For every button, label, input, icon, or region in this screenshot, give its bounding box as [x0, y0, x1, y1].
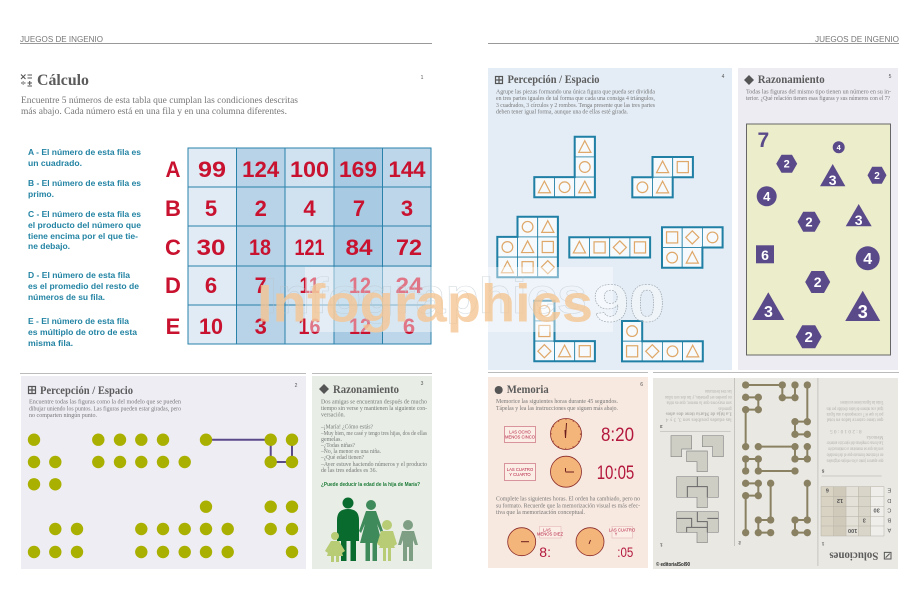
conditions list: misma fila.: [28, 338, 73, 348]
number table: 124: [242, 157, 280, 182]
solution 4 and 5 text, table, title: Las horas completas del ejercicio anterior: [827, 440, 883, 446]
digital time 10:05: 10:05: [597, 463, 634, 484]
dialogue text: versación.: [321, 411, 345, 418]
number table: [165, 148, 431, 344]
solution 4 and 5 text, table, title: Todas las figuras tienen un número: [840, 399, 883, 406]
number table: D: [165, 273, 181, 298]
number table: 72: [396, 235, 422, 260]
number table: 169: [339, 157, 377, 182]
conditions list: B - El número de esta fila es: [28, 178, 141, 188]
dialogue text: Dos amigas se encuentran después de mucho: [321, 398, 427, 406]
figure: father: [337, 498, 359, 561]
figures board: 2: [805, 329, 813, 346]
number table: 4: [303, 196, 316, 221]
model lines: [206, 440, 292, 462]
watermark: Infographics: [257, 274, 593, 334]
number table: 7: [255, 273, 267, 298]
heading: Razonamiento: [758, 74, 825, 86]
number table: 84: [346, 235, 373, 260]
panel: Memoria: [488, 377, 648, 568]
time label 1: MENOS CINCO: [505, 434, 536, 440]
number table: 18: [249, 235, 271, 260]
conditions list: C - El número de esta fila es: [28, 209, 141, 219]
figure: left child: [325, 532, 345, 562]
figure: middle child: [377, 520, 397, 561]
number table: 30: [196, 235, 226, 260]
number table: 16: [298, 314, 320, 339]
page number 5: 5: [889, 74, 892, 80]
dialogue text: –Ayer estuve haciendo números y el producto: [320, 461, 427, 468]
solution 3 text: son mayores que la menor, que es niña: [666, 400, 732, 406]
number table: 99: [198, 157, 226, 182]
conditions list: números de su fila.: [28, 292, 105, 302]
figures board: 2: [874, 171, 880, 182]
solution 3 text: las tres hermanas: [705, 388, 732, 394]
clock 4: [576, 528, 604, 556]
solution table: E: [887, 487, 891, 493]
time label 1: LAS OCHO: [509, 430, 532, 434]
number table: 5: [205, 196, 217, 221]
puzzle piece 2: [632, 157, 693, 197]
instructions: 3 cuadrados, 3 círculos y 2 rombos. Tenga presente que las tres partes: [496, 102, 655, 109]
puzzle piece 3: [497, 217, 558, 277]
figures board: 7: [758, 129, 769, 152]
instructions: [29, 398, 182, 419]
instructions: en tres partes iguales de tal forma que cada una consiga 4 triángulos,: [496, 95, 655, 102]
solution table: 100: [848, 527, 857, 533]
number table: 11: [300, 273, 320, 298]
question: ¿Puede deducir la edad de la hija de María?: [321, 482, 420, 488]
solution 4 and 5 text, table, title: 8 : 2 0 1 0 : 0 5: [830, 428, 862, 434]
solution pieces: 2: [738, 541, 741, 546]
solution table: [821, 487, 891, 536]
number table: A: [166, 157, 181, 182]
intro text: Encuentre 5 números de esta tabla que cumplan las condiciones descritas: [21, 95, 298, 106]
number table: 7: [353, 196, 365, 221]
instructions: Agrupe las piezas formando una única figura que pueda ser dividida: [496, 88, 655, 95]
figures board: 3: [829, 172, 837, 188]
solution table: D: [887, 497, 891, 503]
figures board: 3: [858, 302, 868, 322]
solution 4 and 5 text, table, title: igual a su número de lados dividido por dos: [827, 405, 883, 411]
instructions: deben tener igual forma, aunque una de ellas esté girada.: [496, 108, 628, 116]
heading: Percepción / Espacio: [40, 385, 133, 397]
heading: Soluciones: Soluciones: [829, 549, 878, 561]
time label 2: LAS CUATRO: [507, 467, 534, 472]
instructions: Tápelas y lea las instrucciones que siguen más abajo.: [496, 405, 618, 412]
icon: grid squares: [496, 76, 502, 84]
conditions list: tiene encima por el que tie-: [28, 231, 138, 241]
number table: 121: [294, 235, 324, 260]
dialogue text: gemelas.: [321, 436, 342, 443]
watermark: Infographics: [262, 268, 587, 324]
icon: math operators: [21, 74, 32, 86]
completion text: Complete las siguientes horas. El orden ha cambiado, pero no: [496, 496, 640, 503]
heading: Razonamiento: [333, 384, 399, 396]
figures board: 4: [863, 251, 872, 268]
icon: grid squares: [28, 386, 36, 394]
number table: 3: [401, 196, 413, 221]
time label 4: [609, 526, 636, 538]
solution table: 30: [874, 507, 880, 513]
number table: 6: [403, 314, 415, 339]
number table: 3: [255, 314, 267, 339]
panel: Razonamiento 3: [312, 376, 432, 569]
solution 3 text: [660, 388, 732, 432]
completion text: [496, 496, 640, 516]
family illustration: [325, 498, 418, 562]
solution 4 and 5 text, table, title: que tiene catorce lados en total: [826, 417, 883, 423]
solution 4 and 5 text, table, title: que aparece junto a los relojes originales: [827, 457, 883, 463]
instructions: [496, 398, 618, 412]
solution 4 and 5 text, table, title: son las que se muestran a continuación: [828, 445, 883, 451]
instructions: Todas las figuras del mismo tipo tienen un número en su in-: [746, 88, 891, 95]
solution pieces: [660, 436, 741, 547]
figures board: 3: [855, 212, 863, 228]
watermark: 90: [593, 274, 665, 334]
solution 3 text: La hija de María tiene dos años: [665, 411, 732, 417]
panel: Percepción / Espacio 4: [488, 68, 732, 370]
solution 4 and 5 text, table, title: por lo que el 7 corresponde a una figura: [826, 411, 883, 418]
figures board: 4: [837, 143, 842, 152]
digital time 8:20: 8:20: [601, 425, 634, 446]
number table: 12: [349, 273, 371, 298]
icon: diamond: [319, 384, 329, 394]
dialogue text: tiempo sin verse y mantienen la siguiente con-: [321, 405, 427, 412]
page number 6: 6: [640, 382, 643, 388]
icon: dot: [495, 386, 503, 394]
figures board: 2: [805, 214, 813, 230]
solution pieces: 1: [660, 542, 663, 547]
instructions: no comparten ningún punto.: [29, 412, 97, 419]
conditions list: el producto del número que: [28, 220, 141, 230]
panel: Percepción / Espacio 2: [21, 376, 306, 569]
conditions list: D - El número de esta fila: [28, 270, 130, 280]
figure: mother: [359, 500, 383, 561]
time label 1: [504, 426, 536, 442]
figures board: 2: [784, 159, 790, 171]
number table: 2: [255, 196, 267, 221]
number table: 144: [388, 157, 426, 182]
solution table: 3: [863, 517, 866, 523]
completion text: tiva que la memorización conceptual.: [496, 509, 585, 516]
number table: C: [165, 235, 181, 260]
page number 2: 2: [295, 383, 298, 389]
panel: Cálculo: [21, 72, 431, 348]
panel: Soluciones (upside down): [653, 378, 898, 569]
conditions list: E - El número de esta fila: [28, 316, 129, 326]
puzzle piece 5: [662, 227, 723, 268]
panel: Razonamiento 5: [738, 68, 898, 370]
solution table: C: [887, 507, 891, 513]
time label 4: LAS CUATRO: [609, 528, 636, 532]
digital time 8:: 8:: [539, 544, 551, 560]
clock 1: [550, 418, 582, 450]
solution 4 and 5 text, table, title: en el mismo formato que el del modelo: [827, 451, 883, 458]
conditions list: ne debajo.: [28, 241, 70, 251]
conditions list: es múltiplo de otro de esta: [28, 327, 137, 337]
solution 3 text: gemelas: [718, 405, 732, 411]
puzzle piece 7: [622, 321, 703, 361]
solution table: A: [887, 527, 891, 533]
conditions list: es el promedio del resto de: [28, 281, 139, 291]
intro text: [21, 95, 298, 117]
dialogue text: –¿Qué edad tienen?: [320, 454, 364, 461]
dialogue text: –No, la menor es una niña.: [320, 448, 381, 455]
completion text: su formato. Recuerde que la memorización visual es más efec-: [496, 502, 640, 509]
number table: 24: [396, 273, 423, 298]
instructions: [746, 88, 891, 102]
dot grid: [28, 434, 298, 558]
number table: 100: [290, 157, 329, 182]
icon: check box: [884, 552, 891, 559]
dialogue text: [320, 398, 427, 474]
heading: Cálculo: Cálculo: [37, 72, 89, 89]
figures board: 4: [763, 189, 771, 204]
number table: 12: [349, 314, 371, 339]
figures board: 6: [761, 247, 769, 263]
solution 3 text: 3: [660, 424, 663, 429]
page number 3: 3: [421, 381, 424, 387]
solution 4 and 5 text, table, title: [821, 399, 891, 561]
solution table: 12: [837, 497, 843, 503]
figures board: 2: [814, 274, 822, 290]
solution table: 6: [826, 487, 829, 493]
dialogue text: –¿Todas niñas?: [320, 442, 355, 449]
page number 1: 1: [421, 75, 424, 81]
time label 4: Y: [615, 532, 618, 536]
clock 2: [550, 456, 582, 487]
dialogue text: –¡María! ¿Cómo estás?: [320, 424, 373, 431]
puzzle piece 4: [569, 237, 650, 258]
header: right page: JUEGOS DE INGENIO: [815, 34, 899, 44]
figures board: 3: [764, 304, 773, 321]
heading: Memoria: [507, 384, 549, 396]
page number 4: 4: [722, 74, 725, 80]
digital time :05: :05: [617, 544, 633, 560]
time label 3: LAS: [543, 528, 551, 532]
solution 3 text: no pueden ser gemelas, y las dos son niñas: [665, 394, 732, 400]
header: left page: JUEGOS DE INGENIO: [20, 34, 103, 44]
puzzle piece 1: [534, 137, 595, 197]
time label 2: Y CUARTO: [509, 472, 531, 477]
heading: Percepción / Espacio: [508, 74, 600, 86]
solution 4 and 5 text, table, title: 1: [821, 541, 824, 546]
solution table: B: [887, 517, 891, 523]
dialogue text: –Muy bien, me casé y tengo tres hijas, dos de ellas: [320, 430, 427, 437]
solution 4 and 5 text, table, title: 5: [821, 468, 824, 473]
dialogue text: de las tres edades es 36.: [321, 467, 377, 474]
figures board: [746, 124, 890, 355]
time label 3: MENOS DIEZ: [537, 532, 563, 536]
figure: right child: [398, 520, 418, 561]
time label 3: [537, 526, 563, 538]
number table: B: [165, 196, 181, 221]
icon: diamond: [744, 75, 754, 85]
conditions list: [28, 147, 141, 348]
watermark: [257, 267, 665, 334]
conditions list: primo.: [28, 189, 54, 199]
number table: 10: [199, 314, 223, 339]
instructions: dibujar uniendo los puntos. Las figuras pueden estar giradas, pero: [29, 405, 181, 412]
clock 3: [508, 528, 536, 556]
credit: © editorialSol90: [656, 561, 690, 568]
number table: E: [166, 314, 180, 339]
solution 3 text: las edades posibles son 3, 3 y 4: [666, 416, 732, 422]
instructions: Encuentre todas las figuras como la del modelo que se pueden: [29, 398, 182, 406]
instructions: Memorice las siguientes horas durante 45 segundos.: [496, 398, 618, 405]
conditions list: un cuadrado.: [28, 158, 82, 168]
puzzle piece 6: [534, 301, 595, 361]
time label 2: [504, 464, 536, 480]
instructions: terior. ¿Qué relación tienen esas figuras y sus números con el 7?: [746, 95, 890, 102]
number table: 6: [205, 273, 217, 298]
intro text: más abajo. Cada número está en una fila y en una columna diferentes.: [21, 106, 287, 117]
solution 4 and 5 text, table, title: Memoria: [866, 434, 883, 440]
conditions list: A - El número de esta fila es: [28, 147, 141, 157]
solution dot paths: [742, 381, 811, 536]
instructions: [496, 88, 655, 116]
